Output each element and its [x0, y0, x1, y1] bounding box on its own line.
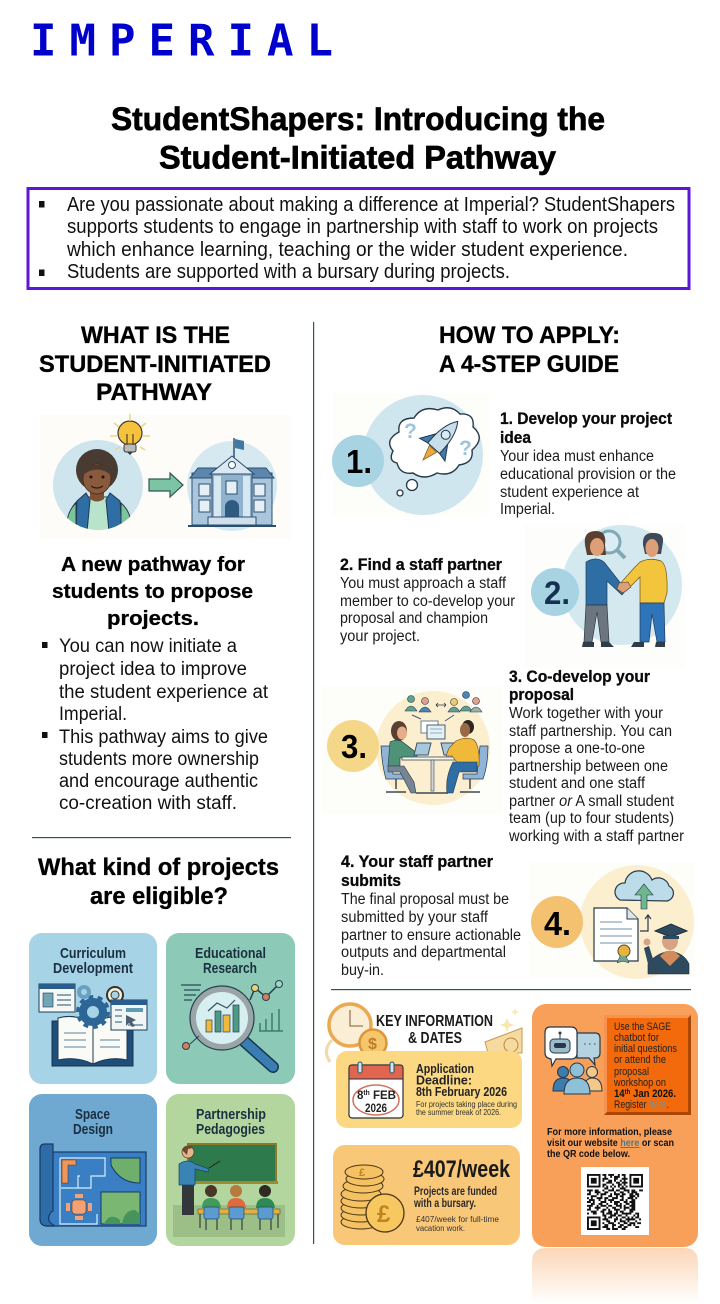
pathway bullet list: students more ownership [59, 749, 259, 770]
step 2 text: You must approach a staff [340, 575, 507, 592]
bursary card: with a bursary. [413, 1196, 476, 1210]
card: curriculum development [29, 933, 157, 1084]
intro box: Students are supported with a bursary during projects. [67, 260, 510, 283]
step 1 text: student experience at [500, 484, 640, 501]
bursary card: £407/week for full-time [416, 1215, 500, 1224]
step 4 text: 4. Your staff partner [341, 853, 494, 871]
bursary card: £ [377, 1201, 391, 1228]
pathway bullet list: and encourage authentic [59, 771, 258, 792]
card: partnership pedagogies [166, 1094, 295, 1246]
step 3 illustration: co-develop: 3. [341, 728, 367, 765]
subheading: a new pathway [52, 553, 253, 630]
step 1 illustration: rocket idea [332, 393, 490, 515]
step 4 text: The final proposal must be [341, 891, 509, 908]
deadline card [336, 1051, 522, 1128]
intro box: which enhance learning, teaching or the wider student experience. [66, 238, 628, 261]
column divider [313, 322, 314, 1244]
intro box: supports students to engage in partnership with staff to work on projects [67, 215, 658, 238]
callout: SAGE chatbot: initial questions [614, 1043, 677, 1055]
step 1 text: idea [500, 429, 532, 447]
step 4 text: submitted by your staff [341, 909, 489, 926]
step 2 text [340, 556, 515, 645]
step 1 illustration: rocket idea: ? [459, 437, 472, 460]
step 3 text: partner or A small student [509, 793, 675, 810]
step 3 text [508, 668, 684, 845]
intro box [28, 188, 689, 288]
title [111, 101, 605, 176]
callout: SAGE chatbot: chatbot for [614, 1032, 659, 1044]
callout: SAGE chatbot [604, 1015, 691, 1115]
callout: SAGE chatbot: Use the SAGE [614, 1021, 671, 1033]
pathway bullet list: You can now initiate a [59, 636, 237, 657]
heading: how to apply: A 4-STEP GUIDE [439, 351, 619, 378]
step 3 text: proposal [509, 686, 574, 704]
pathway bullet list: the student experience at [59, 682, 269, 703]
step 1 illustration: rocket idea: ? [404, 420, 417, 443]
step 1 text: 1. Develop your project [500, 410, 672, 428]
deadline card: 2026 [365, 1101, 387, 1115]
step 2 text: your project. [340, 628, 420, 645]
card: partnership pedagogies: Pedagogies [196, 1121, 265, 1138]
callout: SAGE chatbot: th [625, 1089, 630, 1096]
card: space design: Design [73, 1121, 113, 1138]
heading: eligible projects: are eligible? [90, 883, 228, 910]
card: space design [29, 1094, 157, 1246]
bursary card: vacation work. [416, 1224, 465, 1233]
step 2 illustration: handshake: 2. [544, 575, 570, 611]
step 1 illustration: rocket idea: 1. [346, 443, 372, 480]
illustration: student to university [53, 414, 277, 531]
more information text [547, 1127, 674, 1160]
callout: SAGE chatbot: 14 [614, 1088, 626, 1100]
pathway bullet list: project idea to improve [59, 659, 247, 680]
step 2 text: member to co-develop your [340, 593, 515, 610]
more information text: visit our website here or scan [547, 1138, 674, 1149]
pathway bullet list: This pathway aims to give [59, 727, 268, 748]
key information header [326, 1004, 522, 1062]
step 4 text: partner to ensure actionable [341, 927, 521, 944]
bursary card: Projects are funded [414, 1184, 497, 1198]
pathway bullet list [42, 636, 269, 814]
step 3 text: propose a one-to-one [509, 740, 645, 757]
step 4 text: buy-in. [341, 962, 384, 979]
card: curriculum development: Development [53, 960, 133, 977]
callout: SAGE chatbot: workshop on [613, 1077, 666, 1089]
deadline card: th [363, 1090, 370, 1097]
heading: eligible projects: What kind of projects [38, 854, 279, 881]
deadline card: Deadline: [416, 1072, 472, 1088]
card: educational research: Research [203, 960, 257, 977]
bursary card: £407/week [413, 1156, 511, 1183]
subheading: a new pathway: students to propose [52, 580, 253, 603]
logo: Imperial: IMPERIAL [30, 16, 333, 66]
deadline card: the summer break of 2026. [416, 1108, 501, 1117]
card: educational research: Educational [195, 945, 266, 962]
step 3 text: team (up to four students) [509, 810, 674, 827]
step 3 text: working with a staff partner [508, 828, 684, 845]
step 1 text [500, 410, 676, 518]
step 3 illustration: co-develop [322, 686, 502, 814]
step 1 text: educational provision or the [500, 466, 676, 483]
heading: how to apply: HOW TO APPLY: [439, 322, 620, 349]
step 3 text: Work together with your [509, 705, 663, 722]
deadline card: For projects taking place during [416, 1100, 517, 1109]
step 3 text: 3. Co-develop your [509, 668, 651, 686]
icon: chatbot and people [545, 1027, 602, 1094]
pathway bullet list: co-creation with staff. [59, 793, 237, 814]
key information header: & DATES [408, 1030, 462, 1047]
deadline card: 8th February 2026 [416, 1084, 507, 1099]
panel: further information [532, 1004, 698, 1247]
step 4 illustration: submit [530, 862, 695, 979]
title: StudentShapers: Introducing the [111, 101, 605, 137]
deadline card: FEB [370, 1088, 396, 1102]
step 4 text: outputs and departmental [341, 944, 506, 961]
step 2 text: proposal and champion [340, 610, 488, 627]
step 3 text: staff partnership. You can [509, 723, 672, 740]
bursary card: £ [359, 1167, 365, 1179]
step 2 text: 2. Find a staff partner [340, 556, 503, 574]
step 1 text: Your idea must enhance [500, 448, 654, 465]
pathway bullet list: Imperial. [59, 704, 127, 725]
step 4 text [341, 853, 521, 979]
callout: SAGE chatbot: Jan 2026. [630, 1088, 676, 1100]
heading: eligible projects [38, 854, 279, 910]
more information text: For more information, please [547, 1127, 672, 1138]
heading: how to apply [439, 322, 620, 378]
QR code [581, 1167, 649, 1235]
panel reflection [532, 1248, 698, 1304]
step 1 text: Imperial. [500, 501, 555, 518]
title: Student-Initiated Pathway [159, 140, 556, 176]
key information header: $ [368, 1036, 377, 1053]
step 2 illustration: handshake [525, 525, 685, 667]
callout: SAGE chatbot: or attend the [614, 1054, 666, 1066]
heading: what is the pathway: WHAT IS THE [81, 322, 230, 349]
card: space design: Space [75, 1106, 110, 1123]
step 3 text: student and one staff [509, 775, 646, 792]
key information header: KEY INFORMATION [376, 1013, 493, 1030]
more information text: the QR code below. [547, 1149, 630, 1160]
card: educational research [166, 933, 295, 1084]
card: curriculum development: Curriculum [60, 945, 126, 962]
subheading: a new pathway: projects. [107, 607, 199, 630]
chairs [381, 746, 488, 792]
heading: what is the pathway: STUDENT-INITIATED [39, 351, 271, 378]
heading: what is the pathway: PATHWAY [96, 379, 212, 406]
bursary card [333, 1145, 520, 1245]
step 3 text: partnership between one [509, 758, 668, 775]
subheading: a new pathway: A new pathway for [61, 553, 245, 576]
deadline card: 8 [357, 1088, 364, 1102]
callout: SAGE chatbot: Register here. [614, 1099, 669, 1111]
callout: SAGE chatbot: proposal [614, 1066, 649, 1078]
deadline card: Application [416, 1061, 474, 1076]
card: partnership pedagogies: Partnership [196, 1106, 266, 1123]
step 4 text: submits [341, 872, 401, 890]
heading: what is the pathway [39, 322, 271, 406]
step 4 illustration: submit: 4. [544, 905, 571, 942]
